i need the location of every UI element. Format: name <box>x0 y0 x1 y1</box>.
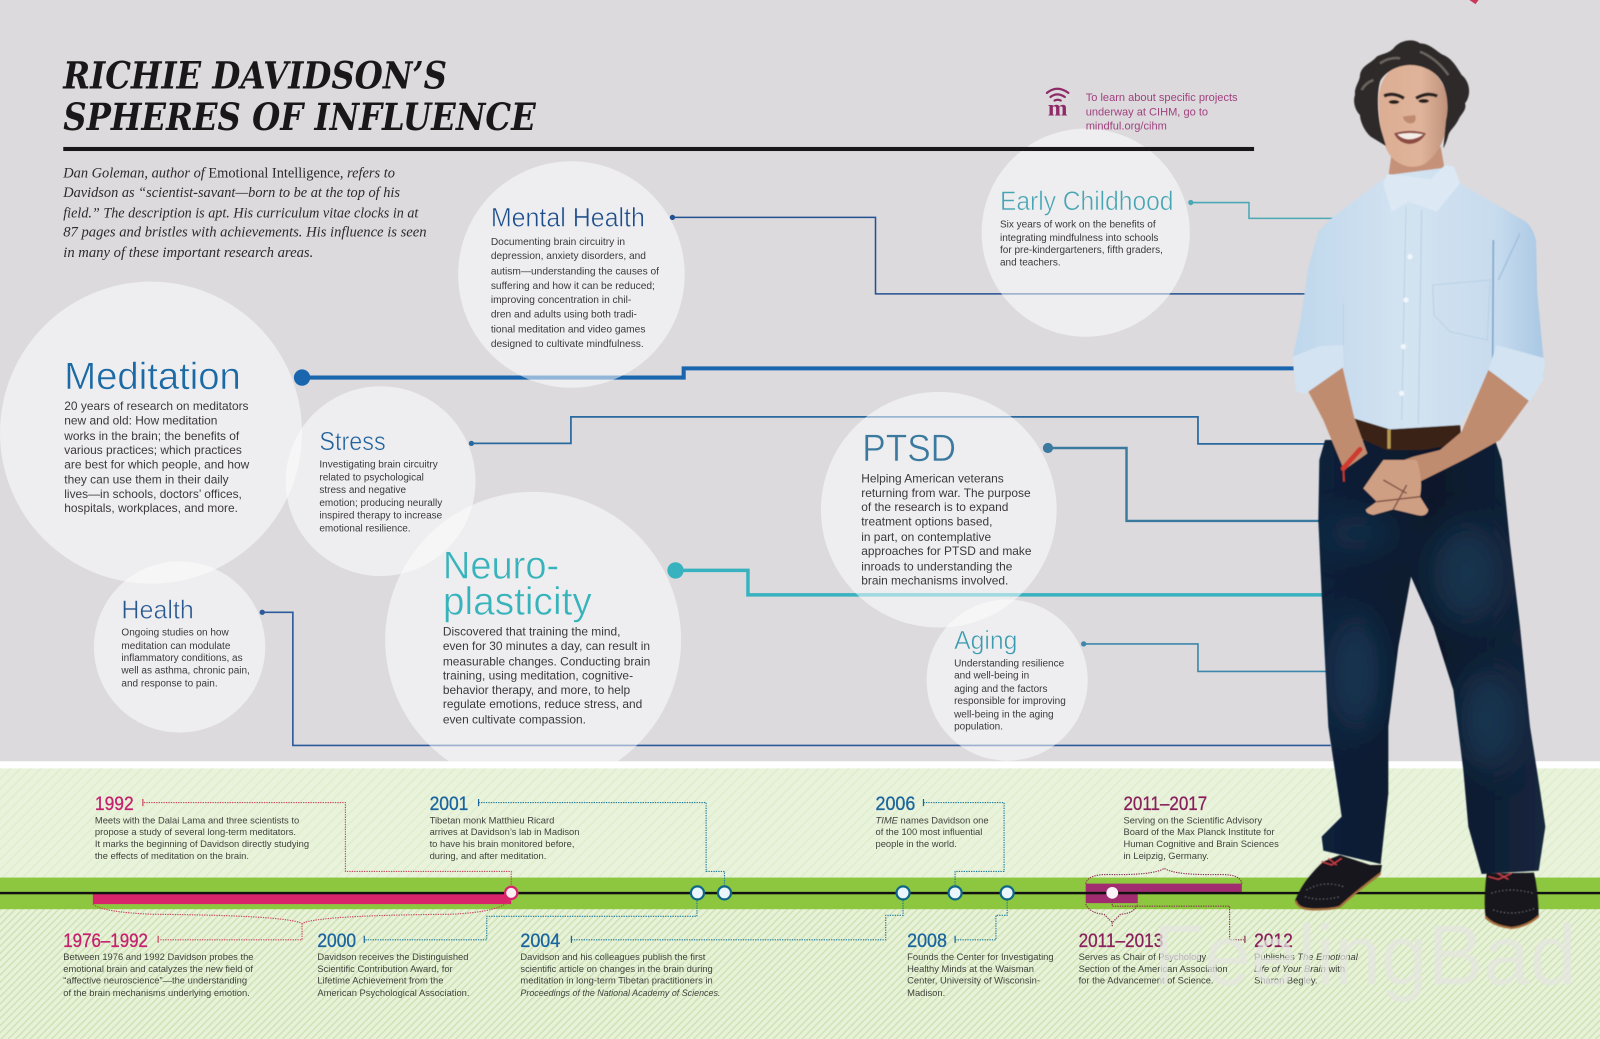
timeline event: 2012: Life of Your Brain with <box>1254 964 1345 974</box>
panel: stress sphere: Stress <box>319 428 386 456</box>
dotted connectors on timeline <box>93 803 1244 940</box>
belt <box>1348 416 1462 450</box>
timeline event: 2011-2017: Serving on the Scientific Advisory <box>1123 815 1262 825</box>
intro paragraph: field.” The description is apt. His curriculum vitae clocks in at <box>63 205 419 221</box>
panel: stress sphere: emotional resilience. <box>319 524 411 535</box>
collar <box>1383 165 1460 212</box>
panel: health sphere: Ongoing studies on how <box>121 628 230 639</box>
timeline event: 2008: Center, University of Wisconsin- <box>907 976 1040 986</box>
panel: neuroplasticity sphere: regulate emotions, reduce stress, and <box>443 697 642 711</box>
panel: meditation sphere <box>0 282 302 584</box>
panel: health sphere <box>94 561 265 733</box>
panel: PTSD sphere: returning from war. The purpose <box>861 486 1031 500</box>
intro paragraph: 87 pages and bristles with achievements. His influence is seen <box>63 225 427 241</box>
panel: aging sphere: Aging <box>954 627 1017 655</box>
panel: stress sphere: emotion; producing neurally <box>319 498 442 509</box>
timeline event: 2000 <box>317 930 470 998</box>
timeline event: 2011-2013: Section of the American Association <box>1079 964 1228 974</box>
timeline event: 2000: American Psychological Association. <box>317 988 470 998</box>
panel: stress sphere: related to psychological <box>319 473 424 484</box>
panel: stress sphere: stress and negative <box>319 485 407 496</box>
connector: PTSD <box>1043 443 1324 521</box>
callout: learn more about CIHM: mindful.org/cihm <box>1086 121 1167 133</box>
panel: neuroplasticity sphere <box>385 492 681 788</box>
panel: neuroplasticity sphere: Discovered that training the mind, <box>443 625 620 639</box>
timeline event: 2001: during, and after meditation. <box>430 851 546 861</box>
timeline event: 2012 <box>1254 930 1359 986</box>
background: grey upper area <box>0 0 1600 761</box>
timeline event: 2001 <box>430 793 579 861</box>
title: RICHIE DAVIDSON’S <box>62 53 447 97</box>
panel: aging sphere: aging and the factors <box>954 684 1047 695</box>
panel: neuroplasticity sphere: training, using meditation, cognitive- <box>443 669 633 683</box>
timeline event: 1976-1992: emotional brain and catalyzes the new field of <box>63 964 253 974</box>
timeline event: 1976-1992: 1976–1992 <box>63 930 148 952</box>
shoes <box>1295 855 1539 929</box>
connector: mental health <box>670 215 1308 294</box>
panel: neuroplasticity sphere: even for 30 minutes a day, can result in <box>443 639 650 653</box>
connector: neuroplasticity <box>667 562 1324 595</box>
panel: meditation sphere: works in the brain; the benefits of <box>63 429 240 443</box>
panel: aging sphere: well-being in the aging <box>953 709 1054 720</box>
timeline event: 2006 <box>876 793 989 849</box>
panel: mental health sphere: designed to cultivate mindfulness. <box>491 339 644 350</box>
timeline event: 2008: 2008 <box>907 930 947 952</box>
connector: stress <box>469 417 1327 446</box>
connector: health <box>260 610 1331 745</box>
intro paragraph: Dan Goleman, author of Emotional Intelligence, refers to <box>62 166 395 182</box>
range bar 1976-1992 <box>93 893 511 904</box>
face <box>1379 63 1449 167</box>
panel: mental health sphere: dren and adults using both tradi- <box>491 309 637 320</box>
panel: meditation sphere: they can use them in their daily <box>64 473 229 487</box>
shirt <box>1293 167 1544 429</box>
panel: PTSD sphere: approaches for PTSD and make <box>861 544 1032 558</box>
timeline nodes <box>505 886 1118 899</box>
rolled sleeve cuffs <box>1293 345 1545 402</box>
timeline event: 2006: people in the world. <box>876 839 957 849</box>
timeline event: 2012: 2012 <box>1254 930 1293 952</box>
title rule <box>63 147 1254 151</box>
timeline event: 2004: meditation in long-term Tibetan practitioners in <box>520 976 713 986</box>
panel: meditation sphere: lives—in schools, doctors’ offices, <box>64 487 242 501</box>
panel: aging sphere: responsible for improving <box>954 696 1066 707</box>
timeline event: 2011-2013: for the Advancement of Science. <box>1079 976 1214 986</box>
panel: PTSD sphere: treatment options based, <box>861 515 992 529</box>
hair <box>1354 40 1469 148</box>
panel: health sphere: well as asthma, chronic pain, <box>120 665 250 676</box>
panel: PTSD sphere: brain mechanisms involved. <box>861 574 1008 588</box>
panel: PTSD sphere: of the research is to expand <box>861 500 1008 514</box>
panel: meditation sphere: hospitals, workplaces, and more. <box>64 501 238 515</box>
range bars 2011-2017 and 2011-2013 <box>1086 884 1242 903</box>
timeline event: 2006: TIME names Davidson one <box>876 815 989 825</box>
timeline event: 2000: Scientific Contribution Award, for <box>317 964 453 974</box>
panel: neuroplasticity sphere: even cultivate compassion. <box>443 712 586 726</box>
timeline event: 2012: Sharon Begley. <box>1254 976 1318 986</box>
timeline event: 1976-1992 <box>63 930 254 998</box>
timeline event: 1976-1992: “affective neuroscience”—the understanding <box>63 976 247 986</box>
timeline event: 2011-2013: Serves as Chair of Psychology <box>1079 952 1207 962</box>
intro paragraph: in many of these important research areas. <box>63 245 313 261</box>
panel: early childhood sphere: Six years of work on the benefits of <box>1000 220 1156 231</box>
panel: meditation sphere: various practices; which practices <box>64 443 242 457</box>
panel: early childhood sphere: Early Childhood <box>1000 186 1173 216</box>
icon: mindful wifi m logo: m <box>1048 95 1068 121</box>
timeline event: 2004: Proceedings of the National Academy of Sciences. <box>520 988 720 998</box>
timeline event: 2004 <box>520 930 720 998</box>
timeline event: 1976-1992: of the brain mechanisms underlying emotion. <box>63 988 250 998</box>
forearms and hands <box>1304 363 1529 516</box>
callout: learn more about CIHM: To learn about specific projects <box>1086 92 1238 104</box>
timeline event: 1992: Meets with the Dalai Lama and three scientists to <box>95 815 299 825</box>
panel: PTSD sphere: Helping American veterans <box>861 472 1004 486</box>
timeline event: 2004: scientific article on changes in the brain during <box>520 964 713 974</box>
panel: mental health sphere: depression, anxiety disorders, and <box>491 251 646 262</box>
panel: neuroplasticity sphere: behavior therapy, and more, to help <box>443 683 631 697</box>
timeline event: 1992 <box>95 793 309 861</box>
timeline event: 2000: Lifetime Achievement from the <box>317 976 443 986</box>
panel: health sphere: inflammatory conditions, as <box>121 653 243 664</box>
jeans <box>1318 440 1545 874</box>
intro paragraph: Davidson as “scientist-savant—born to be at the top of his <box>62 185 400 201</box>
panel: health sphere: Health <box>121 596 194 624</box>
timeline event: 2012: Publishes The Emotional <box>1254 952 1359 962</box>
panel: aging sphere: population. <box>954 722 1003 733</box>
panel: early childhood sphere: and teachers. <box>1000 257 1061 268</box>
panel: aging sphere <box>927 600 1088 761</box>
timeline event: 2011-2017: in Leipzig, Germany. <box>1123 851 1209 861</box>
background: pale green striped timeline area <box>0 761 1600 1039</box>
panel: PTSD sphere <box>821 392 1057 628</box>
panel: meditation sphere: Meditation <box>64 355 241 397</box>
timeline event: 2011-2013 <box>1079 930 1228 986</box>
panel: neuroplasticity sphere: measurable changes. Conducting brain <box>443 654 650 668</box>
timeline event: 2001: arrives at Davidson’s lab in Madison <box>430 827 579 837</box>
timeline event: 2008: Madison. <box>907 988 945 998</box>
watermark: FeelingBad <box>1153 908 1577 1004</box>
panel: stress sphere: Investigating brain circuitry <box>319 459 438 470</box>
timeline event: 2006: of the 100 most influential <box>876 827 982 837</box>
panel: mental health sphere: improving concentration in chil- <box>491 295 631 306</box>
title: SPHERES OF INFLUENCE <box>63 95 536 139</box>
intro paragraph <box>62 166 427 261</box>
dotted connector end ticks <box>143 799 1245 943</box>
panel: health sphere: and response to pain. <box>121 679 218 690</box>
timeline event: 2001: Tibetan monk Matthieu Ricard <box>430 815 554 825</box>
timeline event: 2004: Davidson and his colleagues publish the first <box>520 952 706 962</box>
timeline event: 2011-2017: Board of the Max Planck Institute for <box>1123 827 1275 837</box>
panel: mental health sphere <box>458 161 685 388</box>
timeline event: 2004: 2004 <box>520 930 560 952</box>
panel: stress sphere <box>286 386 476 576</box>
panel: early childhood sphere: integrating mindfulness into schools <box>1000 233 1158 244</box>
panel: mental health sphere: tional meditation and video games <box>491 325 645 336</box>
panel: early childhood sphere <box>982 129 1190 337</box>
timeline event: 2011-2017 <box>1123 793 1279 861</box>
neck <box>1388 147 1446 202</box>
panel: meditation sphere: 20 years of research on meditators <box>64 399 249 413</box>
panel: mental health sphere: Documenting brain circuitry in <box>491 237 625 248</box>
panel: stress sphere: inspired therapy to increase <box>319 510 443 521</box>
timeline event: 1992: 1992 <box>95 793 134 815</box>
panel: meditation sphere: are best for which people, and how <box>64 457 250 471</box>
connector lines from spheres to portrait <box>260 200 1335 745</box>
timeline event: 1992: the effects of meditation on the brain. <box>95 851 249 861</box>
timeline event: 1992: propose a study of several long-term meditators. <box>95 827 296 837</box>
panel: mental health sphere: Mental Health <box>491 203 645 233</box>
timeline event: 2008: Healthy Minds at the Waisman <box>907 964 1034 974</box>
timeline bar <box>0 878 1600 909</box>
top edge red mark <box>1469 0 1479 4</box>
connector: early childhood <box>1188 200 1335 218</box>
panel: PTSD sphere: inroads to understanding the <box>861 559 1013 573</box>
timeline event: 2001: to have his brain monitored before, <box>430 839 574 849</box>
panel: PTSD sphere: in part, on contemplative <box>861 530 991 544</box>
connector: meditation <box>294 368 1294 386</box>
panel: neuroplasticity sphere: plasticity <box>443 580 592 623</box>
panel: neuroplasticity sphere: Neuro- <box>443 545 559 588</box>
panel: health sphere: meditation can modulate <box>121 641 231 652</box>
callout: learn more about CIHM: underway at CIHM, go to <box>1086 106 1208 118</box>
panel: mental health sphere: suffering and how it can be reduced; <box>491 281 655 292</box>
timeline event: 2001: 2001 <box>430 793 468 815</box>
connector: aging <box>1081 641 1329 671</box>
timeline event: 2000: Davidson receives the Distinguished <box>317 952 468 962</box>
title <box>62 53 536 139</box>
callout: learn more about CIHM <box>1047 89 1238 133</box>
panel: PTSD sphere: PTSD <box>862 427 956 469</box>
panel: aging sphere: and well-being in <box>954 671 1029 682</box>
timeline event: 1976-1992: Between 1976 and 1992 Davidson probes the <box>63 952 254 962</box>
panel: aging sphere: Understanding resilience <box>954 658 1065 669</box>
panel: early childhood sphere: for pre-kindergarteners, fifth graders, <box>1000 245 1163 256</box>
panel: meditation sphere: new and old: How meditation <box>64 414 217 428</box>
timeline event: 2011-2013: 2011–2013 <box>1079 930 1163 952</box>
timeline event: 2011-2017: 2011–2017 <box>1123 793 1207 815</box>
timeline event: 2000: 2000 <box>317 930 356 952</box>
timeline event: 1992: It marks the beginning of Davidson directly studying <box>95 839 309 849</box>
timeline event: 2008: Founds the Center for Investigating <box>907 952 1054 962</box>
timeline event: 2006: 2006 <box>876 793 915 815</box>
panel: mental health sphere: autism—understanding the causes of <box>491 266 659 277</box>
portrait: Richard Davidson standing (vector illustration) <box>1293 40 1545 929</box>
timeline event: 2008 <box>907 930 1054 998</box>
timeline event: 2011-2017: Human Cognitive and Brain Sciences <box>1123 839 1279 849</box>
